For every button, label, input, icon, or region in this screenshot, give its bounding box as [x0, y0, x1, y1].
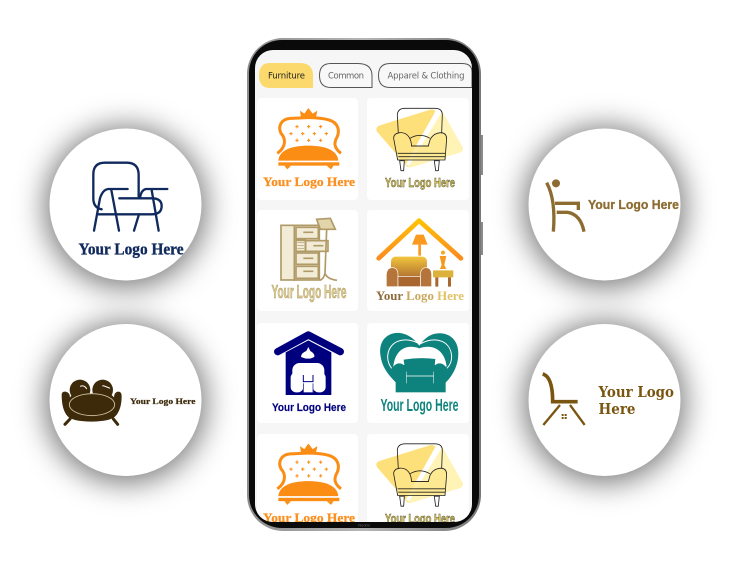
card: house with lamp logo [367, 210, 469, 311]
tab: Furniture [259, 63, 313, 88]
teal logo text: Your Logo Here [380, 395, 459, 415]
tab: Apparel and Clothing [378, 64, 472, 88]
tab: Furniture: Furniture [268, 72, 305, 82]
repeated yellow logo text: Your Logo Here [385, 512, 455, 526]
card: cabinet and lamp logo [257, 210, 358, 311]
logo circle: brown sofa [46, 322, 206, 482]
repeated yellow armchair icon [376, 444, 463, 506]
orange logo text: Your Logo Here [263, 174, 355, 189]
gold logo text: Your Logo Here [588, 198, 679, 212]
phone body [247, 38, 481, 531]
card: yellow armchair logo repeated [367, 434, 469, 522]
logo text line one: Your Logo [598, 383, 674, 401]
tab: Common [320, 64, 372, 88]
house with lamp icon [379, 221, 461, 287]
brown sofa icon [62, 380, 122, 424]
cabinet and lamp icon [281, 218, 337, 280]
tab: Apparel and Clothing: Apparel & Clothing [388, 72, 464, 82]
card: yellow armchair logo [367, 98, 469, 200]
house logo text: Your Logo Here [376, 289, 464, 303]
brown logo text: Your Logo Here [130, 396, 196, 406]
navy house logo text: Your Logo Here [272, 402, 346, 414]
navy armchair icon [93, 163, 167, 231]
yellow logo text: Your Logo Here [385, 176, 455, 190]
phone mockup [247, 38, 483, 534]
side buttons [481, 135, 483, 255]
card: teal heart sofa logo [367, 323, 469, 423]
tab: Common: Common [328, 72, 364, 82]
phone brand mark: Redmi [358, 522, 370, 528]
logo circle: chair with house [524, 322, 684, 482]
navy house icon [278, 335, 340, 395]
card: orange sofa logo repeated [257, 434, 358, 522]
cabinet logo text: Your Logo Here [272, 281, 346, 302]
logo circle: navy armchair [46, 127, 206, 287]
teal heart sofa icon [380, 333, 458, 392]
repeated orange sofa icon [277, 443, 341, 505]
card: orange sofa logo [257, 98, 358, 200]
gold chair icon [547, 179, 584, 232]
logo circle: gold person chair [524, 127, 684, 287]
chair with house icon [543, 374, 585, 425]
card: navy house logo [257, 323, 358, 423]
navy logo text: Your Logo Here [78, 240, 184, 258]
screen [255, 50, 472, 534]
repeated orange logo text: Your Logo Here [263, 510, 355, 525]
logo text line two: Here [598, 400, 636, 418]
yellow armchair icon [376, 108, 463, 171]
orange sofa icon [277, 108, 341, 169]
